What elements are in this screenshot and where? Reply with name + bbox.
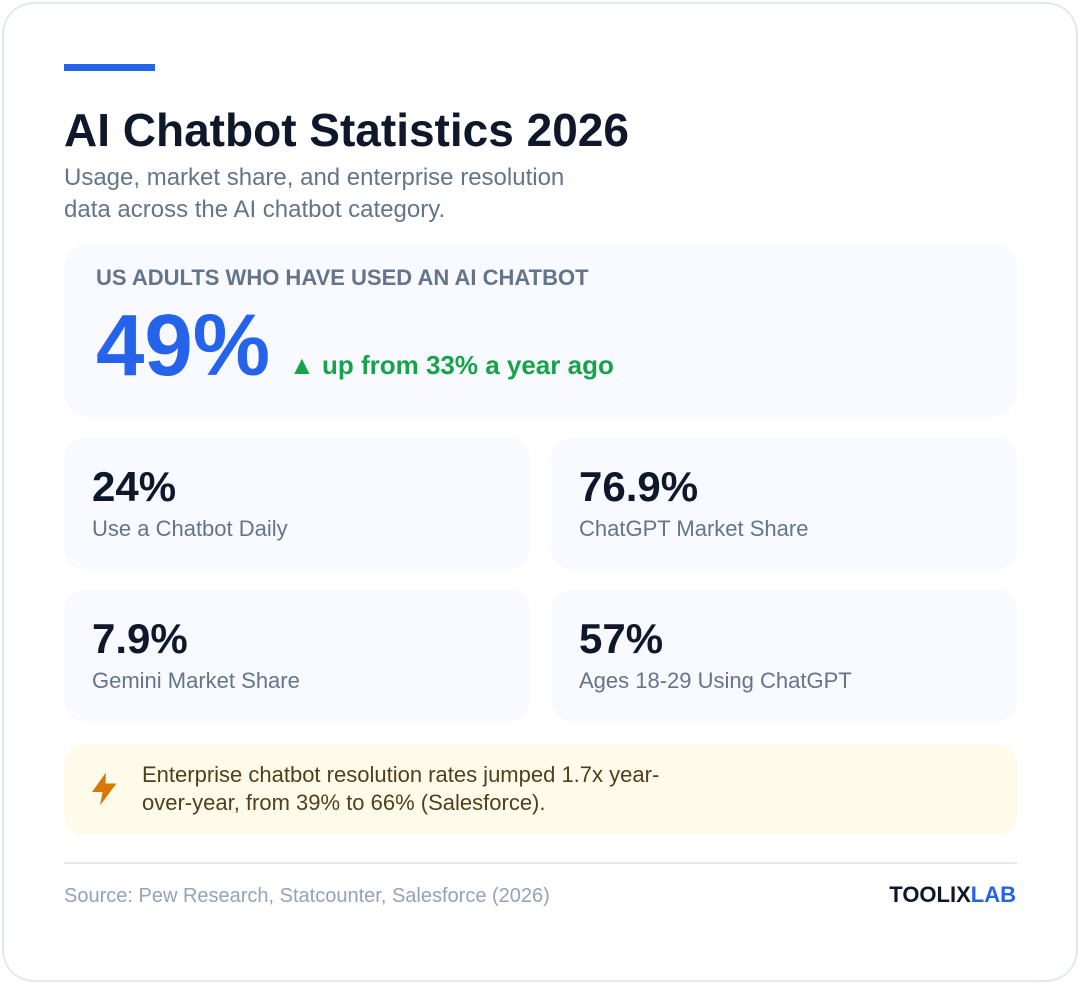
stat label: Use a Chatbot Daily [92, 516, 288, 541]
hero trend: ▲ up from 33% a year ago [289, 350, 614, 380]
callout text: over-year, from 39% to 66% (Salesforce). [142, 790, 546, 814]
callout text: Enterprise chatbot resolution rates jumped 1.7x year- [142, 762, 659, 786]
subtitle [64, 164, 564, 223]
stat label: ChatGPT Market Share [579, 516, 808, 541]
brand logo: TOOLIXLAB [889, 882, 1016, 907]
panel: Gemini share [64, 590, 530, 721]
stat label: Gemini Market Share [92, 668, 300, 693]
callout text [142, 762, 659, 814]
hero number: 49% [96, 297, 270, 394]
subtitle: Usage, market share, and enterprise resolution [64, 164, 564, 191]
stat value: 57% [579, 615, 663, 662]
divider [64, 862, 1017, 864]
hero label: US ADULTS WHO HAVE USED AN AI CHATBOT [96, 265, 589, 290]
panel: daily use [64, 438, 530, 569]
stat value: 76.9% [579, 463, 698, 510]
subtitle: data across the AI chatbot category. [64, 196, 445, 223]
stat value: 24% [92, 463, 176, 510]
accent bar [64, 64, 155, 71]
stat value: 7.9% [92, 615, 188, 662]
panel: ages 18-29 [551, 590, 1017, 721]
title: AI Chatbot Statistics 2026 [64, 104, 629, 156]
panel: insight callout [64, 744, 1017, 835]
source note: Source: Pew Research, Statcounter, Salesforce (2026) [64, 885, 550, 907]
panel: hero stat [64, 244, 1017, 417]
icon: lightning bolt [92, 772, 116, 806]
panel: ChatGPT share [551, 438, 1017, 569]
stat label: Ages 18-29 Using ChatGPT [579, 668, 852, 693]
